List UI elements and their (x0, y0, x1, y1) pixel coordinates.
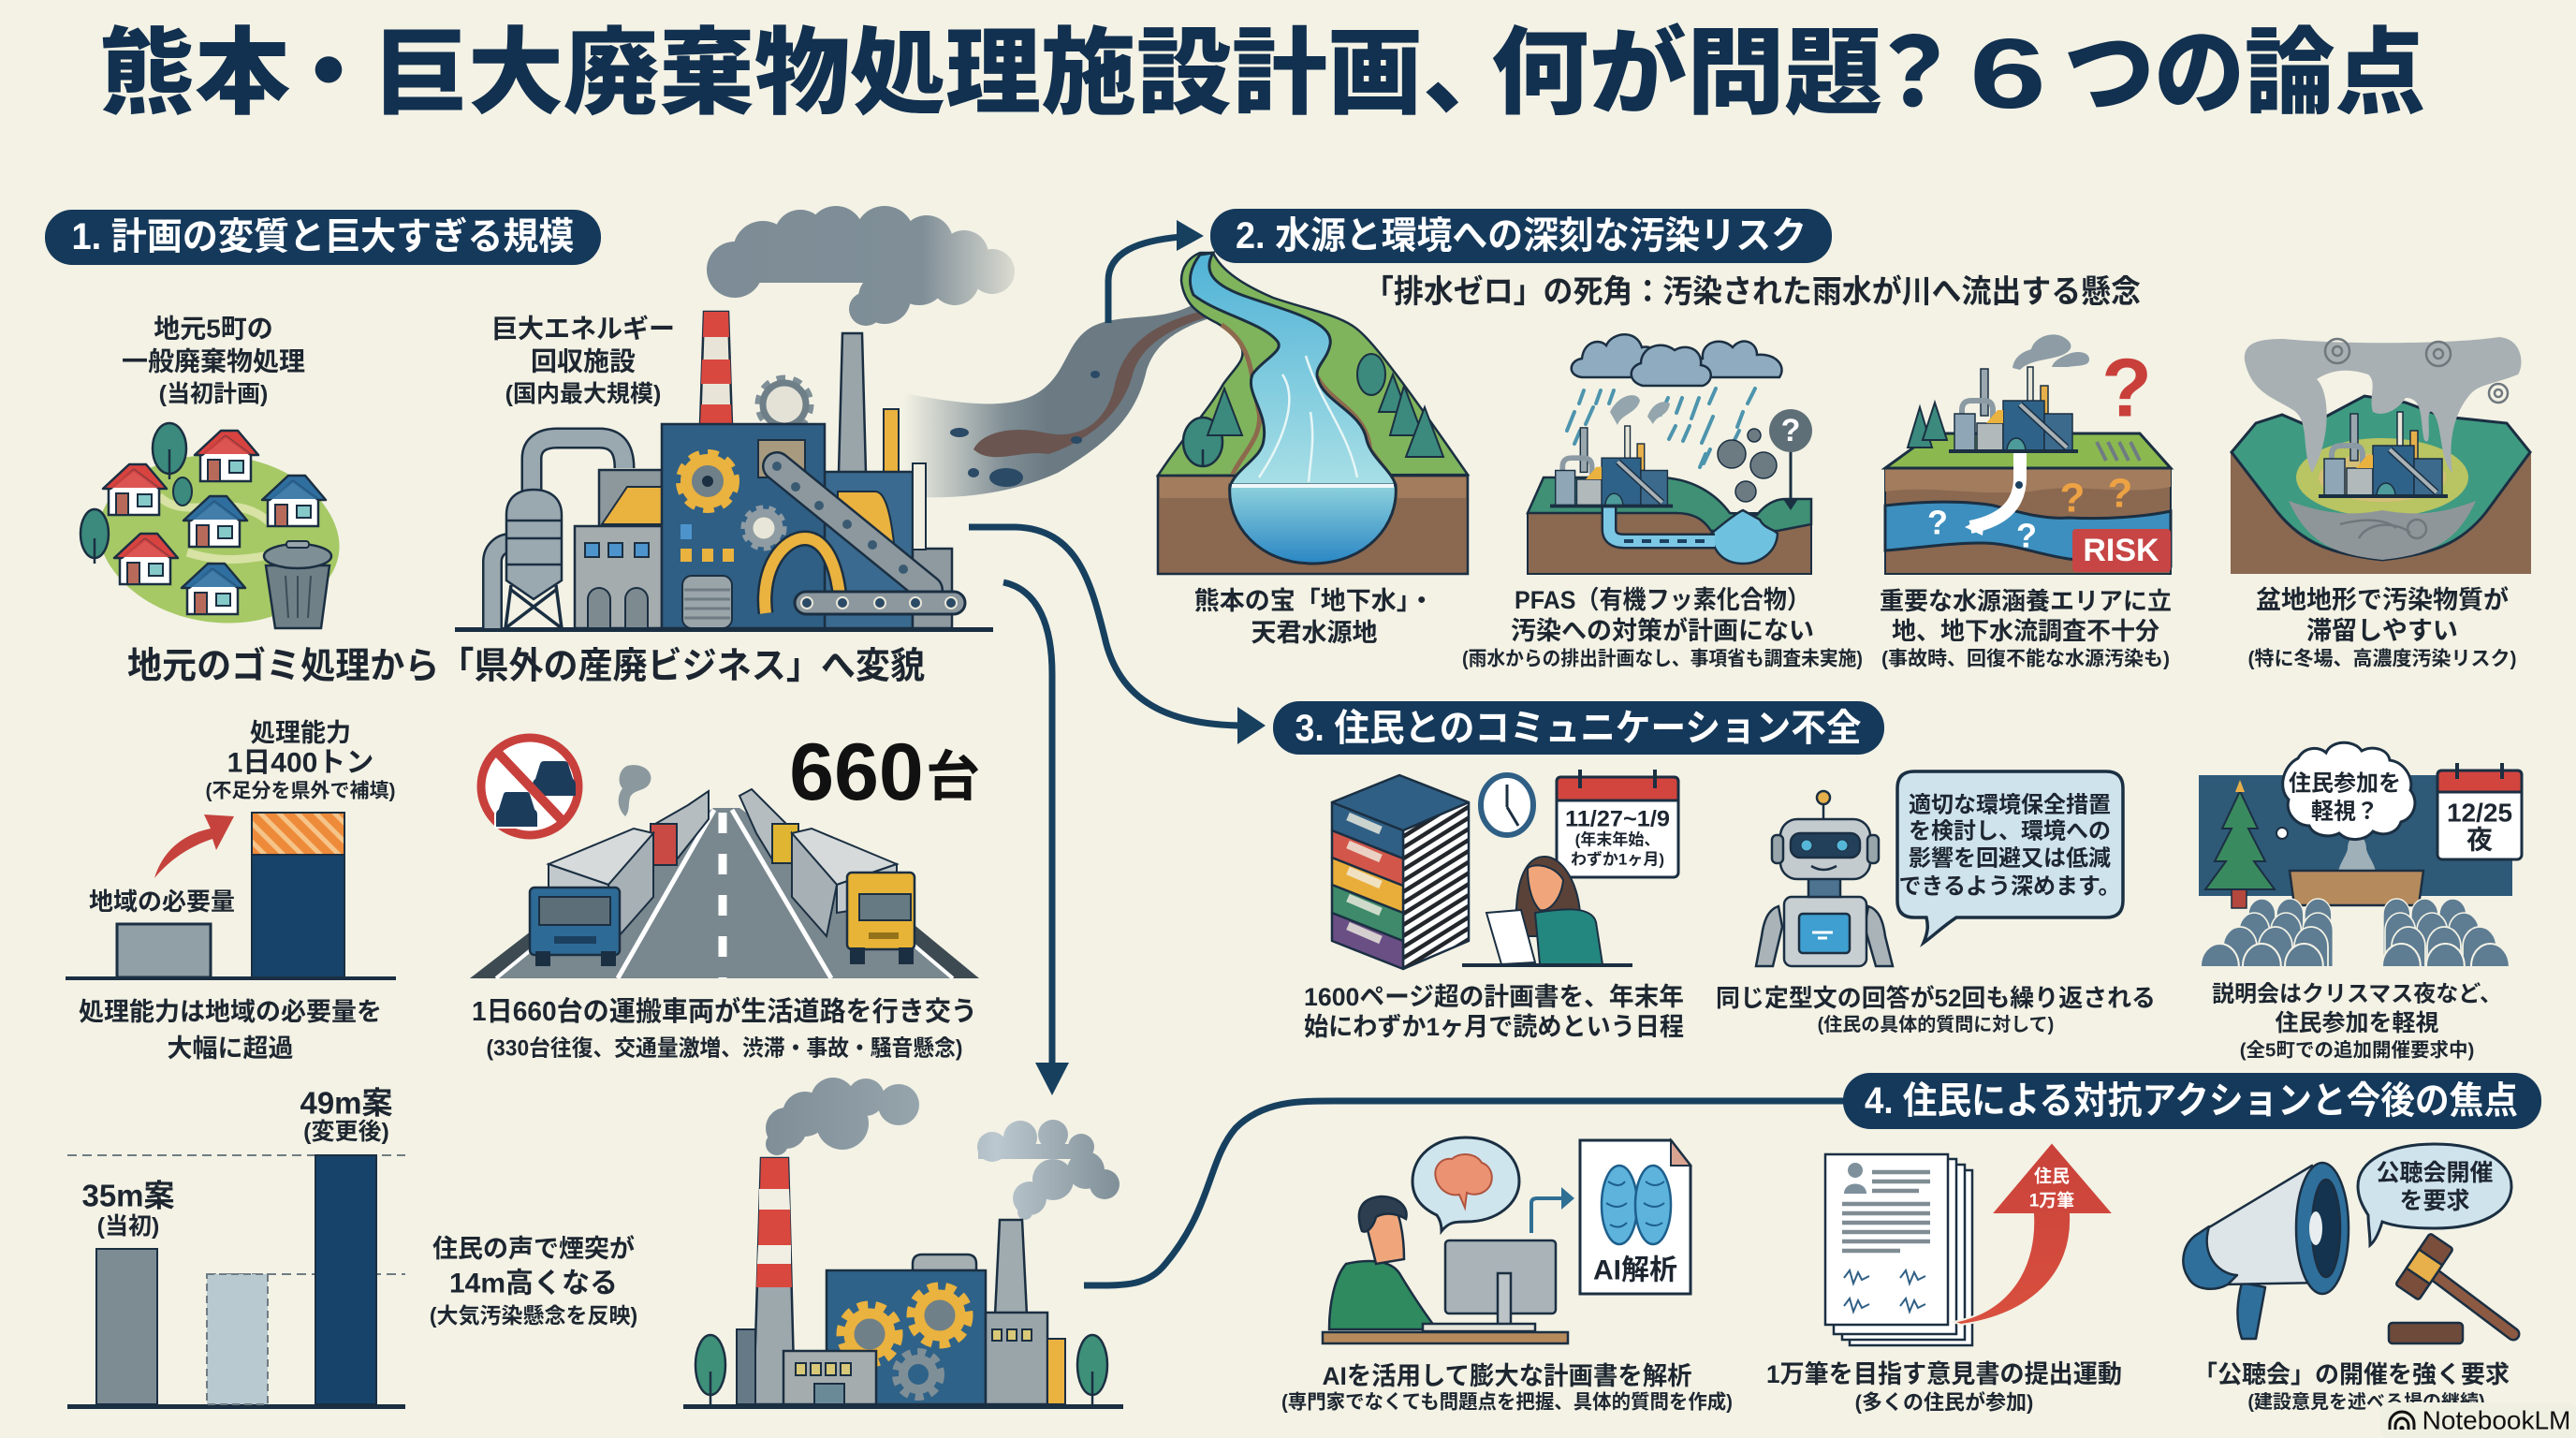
text: 52 repeated answers (1716, 984, 2156, 1035)
arrow: to section 4 (1084, 1101, 1849, 1285)
chart: chimney height: 35m案 (81, 1178, 175, 1213)
label: huge energy plant: 回収施設 (531, 346, 636, 376)
text: public hearing caption: (建設意見を述べる場の継続) (2247, 1391, 2485, 1413)
icon: water recharge area risk: ? (1927, 504, 1948, 541)
label: local plan (122, 315, 305, 407)
icon: water recharge area risk (1885, 334, 2171, 574)
arrow: 10,000 signatures: 1万筆 (2029, 1191, 2074, 1211)
chart: capacity vs need: 地域の必要量 (89, 888, 235, 916)
labels: section 2 captions: (特に冬場、高濃度汚染リスク) (2248, 648, 2516, 670)
heading: section 4 (1843, 1073, 2541, 1129)
icon: water recharge area risk: ? (2060, 476, 2085, 521)
labels: section 2 captions: 重要な水源涵養エリアに立 (1880, 587, 2172, 615)
text: capacity exceeds need (79, 998, 382, 1063)
icon: calendar period: 11/27~1/9 (1565, 807, 1670, 831)
text: 660 vehicles caption: 1日660台の運搬車両が生活道路を行き交う (472, 995, 977, 1027)
stat: 660 vehicles: 台 (926, 747, 980, 807)
label: huge energy plant: (国内最大規模) (505, 381, 661, 407)
label: huge energy plant: 巨大エネルギー (491, 315, 675, 343)
title: ・ (281, 22, 376, 126)
subheading: zero discharge blind spot: 「排水ゼロ」の死角：汚染された雨水が川へ流出する懸念 (1364, 273, 2141, 310)
icon: clock (1481, 775, 1533, 835)
label: capacity: 処理能力 (250, 719, 351, 747)
speech bubble: stock answer: できるよう深めます。 (1898, 874, 2121, 899)
icon: water recharge area risk: ? (2016, 517, 2037, 554)
text: chimney 14m higher (430, 1234, 637, 1328)
text: 1600 pages: 1600ページ超の計画書を、年末年 (1304, 983, 1684, 1011)
arrow: to section 3 (969, 527, 1266, 744)
thought bubble: brain (1412, 1137, 1519, 1231)
icon: calendar period (1557, 770, 1678, 877)
heading: section 2: 2. 水源と環境への深刻な汚染リスク (1236, 215, 1807, 257)
labels: section 2 captions: (雨水からの排出計画なし、事項省も調査未実施) (1462, 648, 1863, 670)
title (99, 19, 2425, 129)
text: chimney 14m higher: (大気汚染懸念を反映) (430, 1303, 637, 1328)
text: opinion movement (1766, 1360, 2122, 1414)
icon: calendar 12/25: 夜 (2466, 826, 2493, 854)
text: Christmas meetings: 説明会はクリスマス夜など、 (2212, 981, 2502, 1007)
text: capacity exceeds need: 大幅に超過 (167, 1034, 294, 1063)
chart: capacity vs need (66, 813, 396, 980)
title: 6 (1969, 19, 2046, 129)
title: 熊本 (99, 22, 290, 126)
icon: calendar period: (年末年始、 (1575, 829, 1660, 848)
speech bubble: stock answer (1897, 771, 2123, 943)
icon: no entry sign (481, 738, 578, 835)
labels: section 2 captions (1194, 585, 2516, 670)
label: capacity (206, 719, 395, 801)
heading: section 4: 4. 住民による対抗アクションと今後の焦点 (1865, 1080, 2518, 1122)
icon: river and groundwater pool (1158, 253, 1468, 574)
title: つの論点 (2064, 22, 2425, 126)
text: opinion movement: 1万筆を目指す意見書の提出運動 (1766, 1360, 2122, 1388)
speech bubble: demand public hearing (2358, 1144, 2511, 1245)
icon: gavel (2389, 1233, 2513, 1343)
label: local plan: 一般廃棄物処理 (122, 346, 305, 376)
chart: chimney height: (当初) (97, 1213, 159, 1240)
text: AI use (1281, 1362, 1733, 1414)
icon: calendar 12/25: 12/25 (2447, 798, 2512, 828)
smoke clouds (707, 206, 1015, 326)
labels: section 2 captions: 汚染への対策が計画にない (1511, 616, 1814, 645)
icon: opinion documents (1825, 1154, 1972, 1345)
thought bubble: ignoring residents: 軽視？ (2311, 800, 2378, 824)
arrow: 10,000 signatures: 住民 (2034, 1167, 2070, 1187)
speech bubble: stock answer: 適切な環境保全措置 (1909, 792, 2111, 818)
badge: NotebookLM: NotebookLM (2422, 1406, 2570, 1434)
text: 52 repeated answers: (住民の具体的質問に対して) (1818, 1014, 2054, 1035)
icon: water recharge area risk: ? (2101, 341, 2152, 434)
document: AI analysis: AI解析 (1593, 1255, 1677, 1286)
chart: chimney height: 49m案 (300, 1086, 393, 1120)
text: capacity exceeds need: 処理能力は地域の必要量を (79, 998, 382, 1026)
text: 1600 pages: 始にわずか1ヶ月で読めという日程 (1304, 1013, 1684, 1041)
title: 何が問題 (1491, 22, 1882, 126)
arrow: 10,000 signatures (1954, 1142, 2114, 1325)
smoke: small factory (766, 1078, 1120, 1220)
labels: section 2 captions: 熊本の宝「地下水」・ (1194, 587, 1434, 615)
label: huge energy plant (491, 315, 675, 407)
icon: rain runoff with PFAS (1528, 334, 1812, 574)
icon: stack of binders (1332, 775, 1469, 969)
speech bubble: stock answer: 影響を回避又は低減 (1909, 846, 2111, 871)
icon: road with trucks (470, 765, 979, 978)
icon: megaphone (2183, 1163, 2349, 1339)
icon: calendar period: わずか1ヶ月) (1571, 850, 1664, 869)
text: AI use: (専門家でなくても問題点を把握、具体的質問を作成) (1281, 1391, 1733, 1414)
labels: section 2 captions: 滞留しやすい (2306, 617, 2458, 645)
text: chimney 14m higher: 14m高くなる (449, 1268, 618, 1299)
summary text: change of plan: 地元のゴミ処理から「県外の産廃ビジネス」へ変貌 (127, 646, 925, 687)
text: chimney 14m higher: 住民の声で煙突が (432, 1234, 635, 1263)
labels: section 2 captions: 地、地下水流調査不十分 (1892, 617, 2159, 645)
labels: section 2 captions: 天君水源地 (1251, 619, 1378, 647)
label: capacity: (不足分を県外で補填) (206, 781, 395, 801)
text: 660 vehicles caption: (330台往復、交通量激増、渋滞・事故・騒音懸念) (487, 1035, 962, 1062)
icon: robot (1756, 791, 1893, 966)
chart: chimney height (67, 1086, 405, 1409)
arrow: down to small factory (1003, 582, 1069, 1095)
thought bubble: ignoring residents: 住民参加を (2289, 771, 2401, 796)
stat: 660 vehicles: 660 (789, 727, 924, 817)
speech bubble: stock answer: を検討し、環境への (1909, 818, 2111, 844)
text: public hearing caption: 「公聴会」の開催を強く要求 (2193, 1360, 2510, 1388)
badge: NotebookLM (2380, 1402, 2576, 1438)
label: local plan: 地元5町の (154, 315, 273, 343)
speech bubble: demand public hearing: 公聴会開催 (2376, 1160, 2494, 1186)
icon: meeting hall at Christmas (2199, 775, 2512, 966)
icon: basin with trapped smoke (2231, 337, 2531, 574)
chart: chimney height: (変更後) (303, 1119, 389, 1145)
label: capacity: 1日400トン (227, 747, 373, 779)
text: public hearing caption (2193, 1360, 2510, 1413)
icon: person with computer (1323, 1196, 1568, 1343)
text: 1600 pages (1304, 983, 1684, 1041)
icon: water recharge area risk: ? (2108, 470, 2132, 517)
text: AI use: AIを活用して膨大な計画書を解析 (1322, 1362, 1692, 1390)
icon: small factory (683, 1158, 1123, 1409)
heading: section 1: 1. 計画の変質と巨大すぎる規模 (71, 216, 575, 257)
title: 巨大廃棄物処理施設計画、 (373, 22, 1518, 126)
document: AI analysis (1580, 1140, 1690, 1294)
text: 52 repeated answers: 同じ定型文の回答が52回も繰り返される (1716, 984, 2156, 1012)
text: Christmas meetings: 住民参加を軽視 (2275, 1010, 2439, 1036)
text: opinion movement: (多くの住民が参加) (1855, 1391, 2033, 1414)
arrow: to section 2 (1108, 220, 1204, 323)
text: Christmas meetings: (全5町での追加開催要求中) (2240, 1039, 2474, 1062)
icon: rain runoff with PFAS: ? (1781, 413, 1800, 448)
title: ？ (1866, 22, 1961, 126)
labels: section 2 captions: PFAS（有機フッ素化合物） (1515, 586, 1810, 614)
heading: section 3: 3. 住民とのコミュニケーション不全 (1295, 708, 1861, 749)
icon: calendar 12/25 (2437, 763, 2522, 859)
text: 660 vehicles caption (472, 995, 977, 1062)
label: local plan: (当初計画) (159, 381, 268, 407)
speech bubble: demand public hearing: を要求 (2399, 1188, 2470, 1214)
thought bubble: ignoring residents (2276, 742, 2415, 840)
polluted stream (903, 304, 1215, 497)
arrow: to AI analysis (1531, 1187, 1574, 1233)
icon: water recharge area risk: RISK (2083, 533, 2159, 568)
text: Christmas meetings (2212, 981, 2502, 1062)
labels: section 2 captions: 盆地地形で汚染物質が (2256, 585, 2509, 614)
icon: person reading (1462, 857, 1632, 967)
icon: village with trash can (80, 423, 340, 628)
labels: section 2 captions: (事故時、回復不能な水源汚染も) (1881, 648, 2170, 670)
icon: big factory (455, 312, 993, 632)
